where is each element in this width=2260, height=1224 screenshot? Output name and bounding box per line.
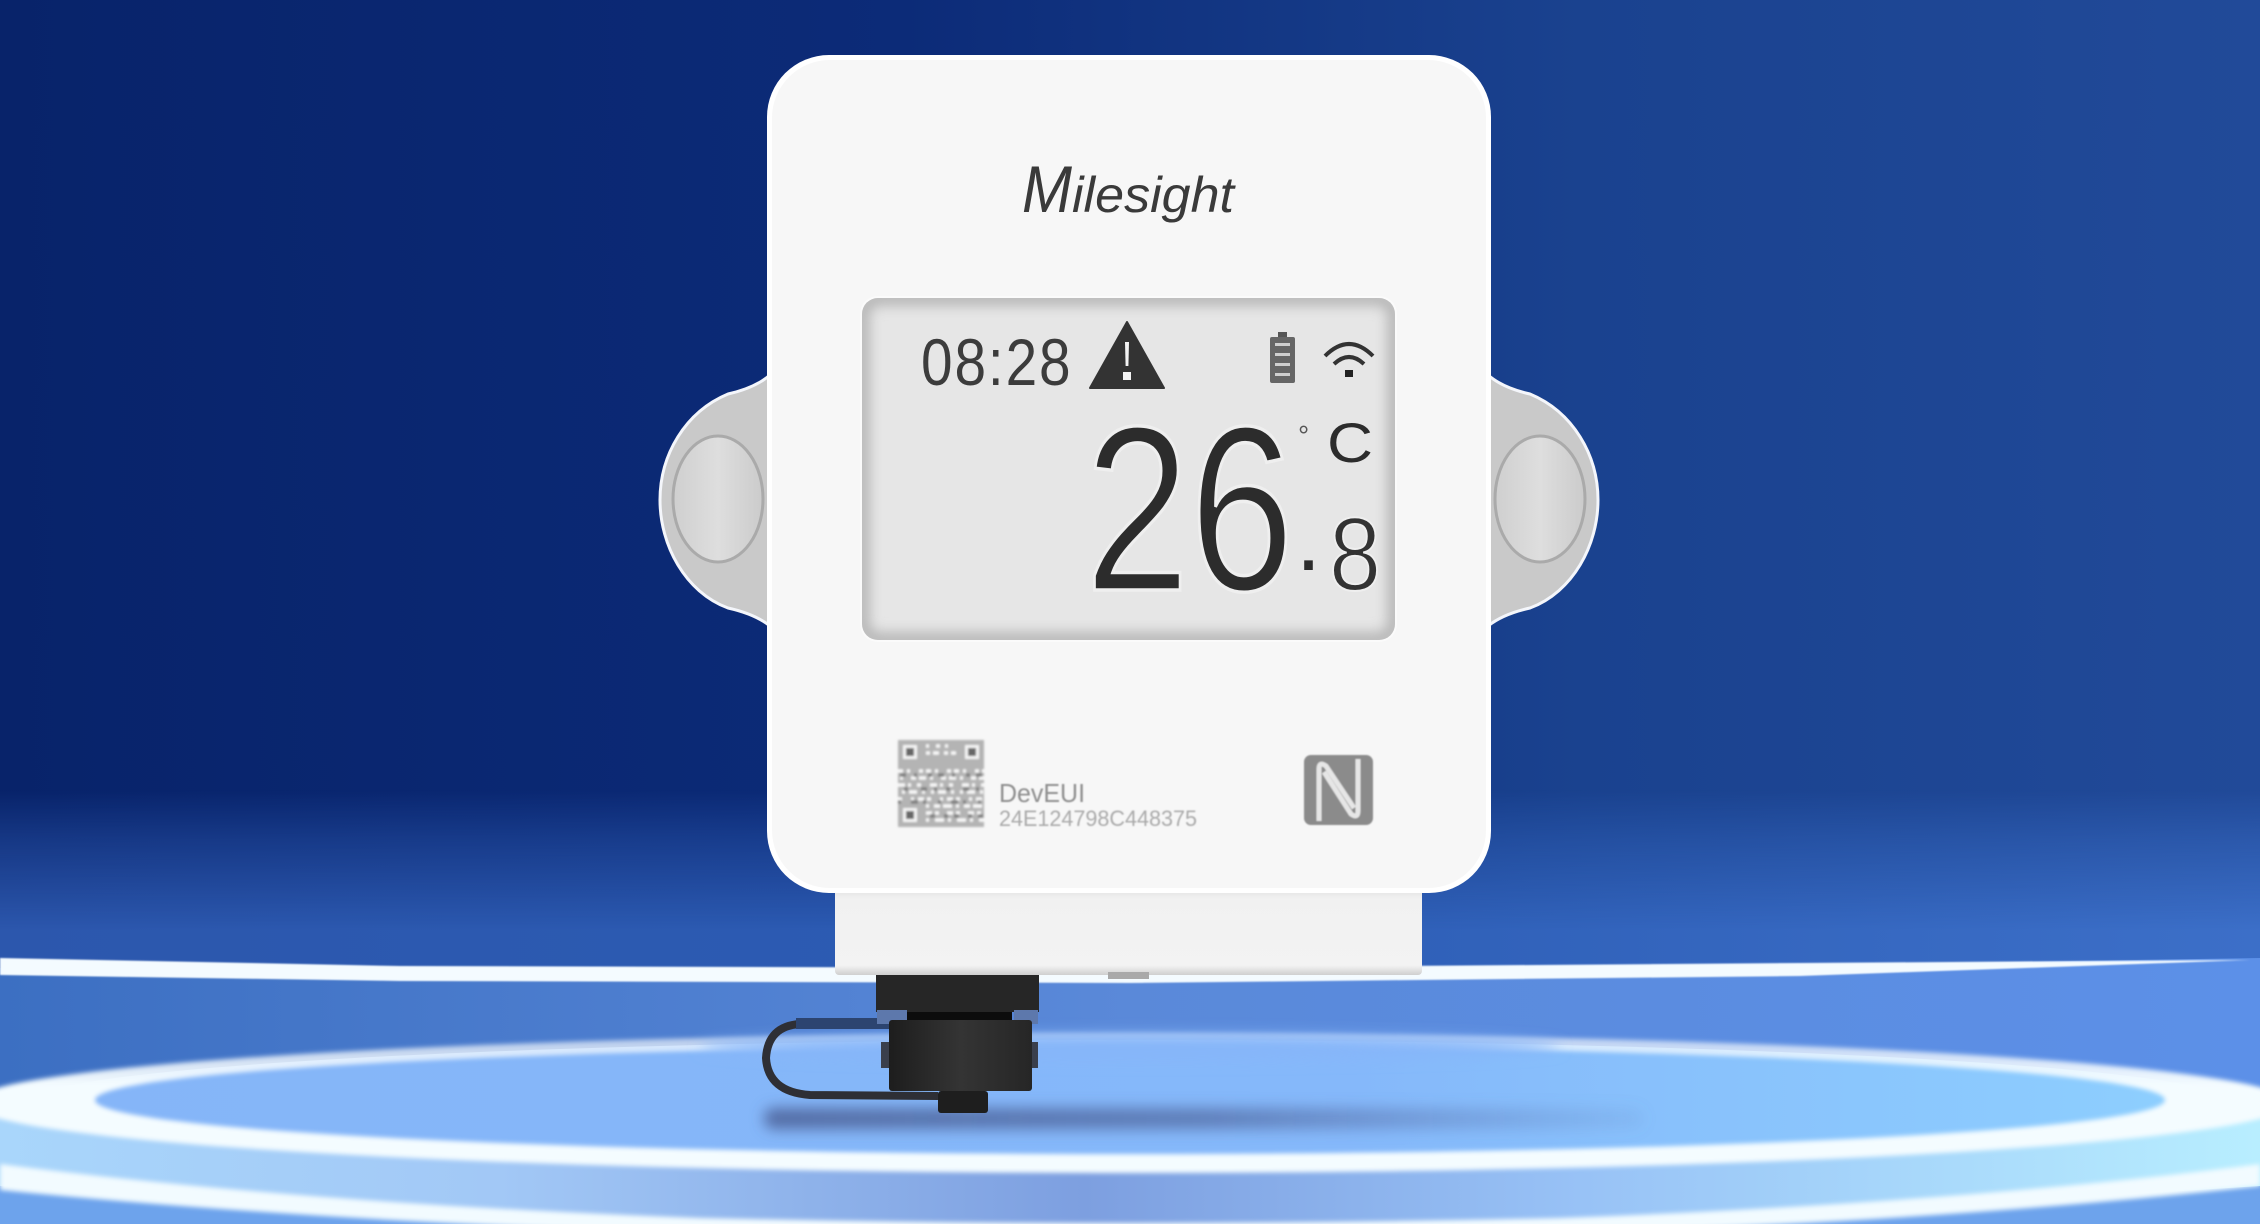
lower floor area xyxy=(0,1102,2260,1224)
lower ring arc xyxy=(0,1164,2260,1224)
logo xyxy=(1022,152,1236,226)
peg xyxy=(1495,436,1585,562)
device shadow on floor xyxy=(764,1108,1644,1129)
device body xyxy=(767,55,1491,893)
logo: ilesight xyxy=(1072,167,1236,223)
QR code xyxy=(898,740,984,827)
floor band xyxy=(0,958,2260,1224)
right mounting ear xyxy=(1488,375,1598,626)
floor: stage with glowing rings xyxy=(0,958,2260,1224)
floor corners below arc xyxy=(0,1186,2260,1224)
lower collar xyxy=(835,880,1422,979)
temperature reading: 8 xyxy=(1329,495,1381,612)
temperature reading: C xyxy=(1327,411,1373,474)
glowing ring xyxy=(0,1033,2260,1173)
temperature reading: 26 xyxy=(1085,378,1294,641)
peg xyxy=(673,436,763,562)
finder patterns xyxy=(903,745,979,822)
gland upper block xyxy=(876,975,1039,1012)
background: deep blue gradient xyxy=(0,0,2260,968)
icon: wifi xyxy=(1325,344,1373,377)
temperature reading: . xyxy=(1296,490,1321,590)
connector: black cable gland with cap loop xyxy=(766,975,1039,1113)
gland tip xyxy=(938,1091,988,1113)
ring top fade near centre xyxy=(700,1034,1560,1060)
gland body xyxy=(889,1020,1032,1091)
horizon light line xyxy=(0,958,2250,983)
glowing inner disc xyxy=(30,1040,2230,1164)
time: 08:28 xyxy=(921,326,1071,400)
cap loop xyxy=(766,1024,938,1096)
gland collar xyxy=(900,1012,1012,1021)
temperature reading: ° xyxy=(1298,420,1309,451)
icon: warning triangle xyxy=(1090,322,1164,388)
LCD screen xyxy=(860,296,1397,642)
DevEUI label xyxy=(999,778,1197,831)
cap strap highlight xyxy=(796,1018,894,1029)
icon: NFC mark xyxy=(1304,755,1373,825)
icon: battery xyxy=(1270,332,1295,383)
left mounting ear xyxy=(660,375,770,626)
logo: M xyxy=(1022,152,1072,226)
DevEUI label: DevEUI xyxy=(999,778,1085,808)
serial number: 24E124798C448375 xyxy=(999,806,1197,831)
